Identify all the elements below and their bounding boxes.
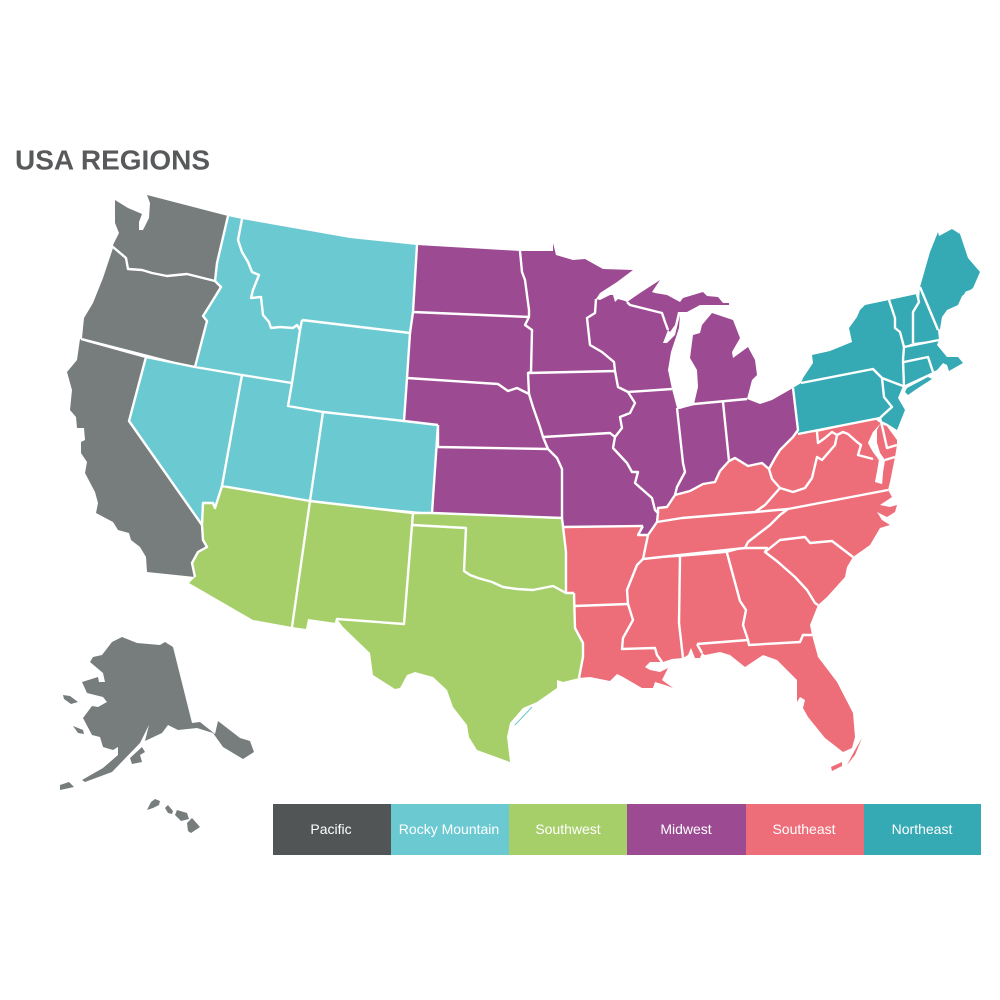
Maine coastal island outline [962,290,973,305]
state: South Carolina [765,537,853,605]
state: Michigan [627,280,757,404]
state: North Dakota [413,245,529,317]
state: Maine [920,229,980,330]
state: Long Island [905,377,932,395]
state: Hawaii [147,799,200,833]
state: Washington [113,195,228,281]
Chesapeake Bay [868,424,885,484]
legend item: Rocky Mountain: Rocky Mountain [399,821,499,837]
title: USA REGIONS [15,144,210,176]
state: Massachusetts [904,340,963,371]
legend item: Pacific: Pacific [310,821,352,837]
state: Illinois [613,389,685,513]
state: Arizona [189,486,310,627]
state: Mississippi [622,557,683,662]
state: Nebraska [404,378,548,449]
state: Rhode Island [928,355,943,372]
state: Indiana [675,402,729,495]
state: Kansas [432,425,562,518]
map: Midwest region [404,243,798,535]
state: Delaware [880,418,897,448]
state: Connecticut [904,357,933,385]
state: New Mexico [292,501,413,629]
state: Alaska [60,637,254,790]
legend item: Southeast [746,804,864,855]
state: Vermont [889,294,919,347]
state: New Jersey [878,378,905,430]
state: Nevada [129,357,242,525]
state: North Carolina [745,490,897,557]
map: Northeast region [793,229,980,434]
state: California [67,339,207,577]
legend item: Northeast: Northeast [892,821,952,837]
state: Maryland [817,418,897,460]
map: Rocky Mountain region [129,216,438,525]
state: South Dakota [407,312,532,394]
state: New Hampshire [913,287,939,343]
legend item: Southeast: Southeast [772,821,836,837]
state: Arkansas [562,518,648,606]
map: Southeast region [562,418,897,771]
state: Tennessee [643,509,788,559]
state: Minnesota [520,243,633,373]
state: Texas [337,525,583,762]
sliver: Padre Island [515,707,532,725]
state: Iowa [528,371,635,437]
state: Florida [697,635,855,752]
state: Ohio [723,388,798,469]
legend item: Rocky Mountain [391,804,509,855]
legend item: Midwest: Midwest [660,821,712,837]
state: Idaho [195,216,300,383]
state: Wisconsin [587,295,680,392]
state: Pennsylvania [793,369,892,434]
state borders [81,216,939,678]
state: Wyoming [288,320,410,421]
legend item: Northeast [864,804,981,855]
state: West Virginia [769,432,837,492]
map: Pacific region [60,195,254,833]
legend item: Pacific [273,804,391,855]
legend item: Midwest [627,804,746,855]
map: Southwest region [189,486,583,762]
legend item: Southwest [509,804,627,855]
state: Georgia [727,548,818,645]
legend [273,804,981,855]
state: Colorado [310,412,438,513]
state: Kentucky [657,458,780,522]
state: Missouri [543,433,658,535]
state: Montana [238,219,417,333]
state: Virginia [755,432,895,512]
state: New York [801,300,904,387]
state: Utah [222,375,323,501]
state: Florida Keys [831,738,862,771]
state: Alabama [679,553,748,658]
legend item: Southwest: Southwest [535,821,601,837]
state: Louisiana [575,604,673,688]
state: Oregon [82,248,221,367]
state: Oklahoma [412,513,566,593]
